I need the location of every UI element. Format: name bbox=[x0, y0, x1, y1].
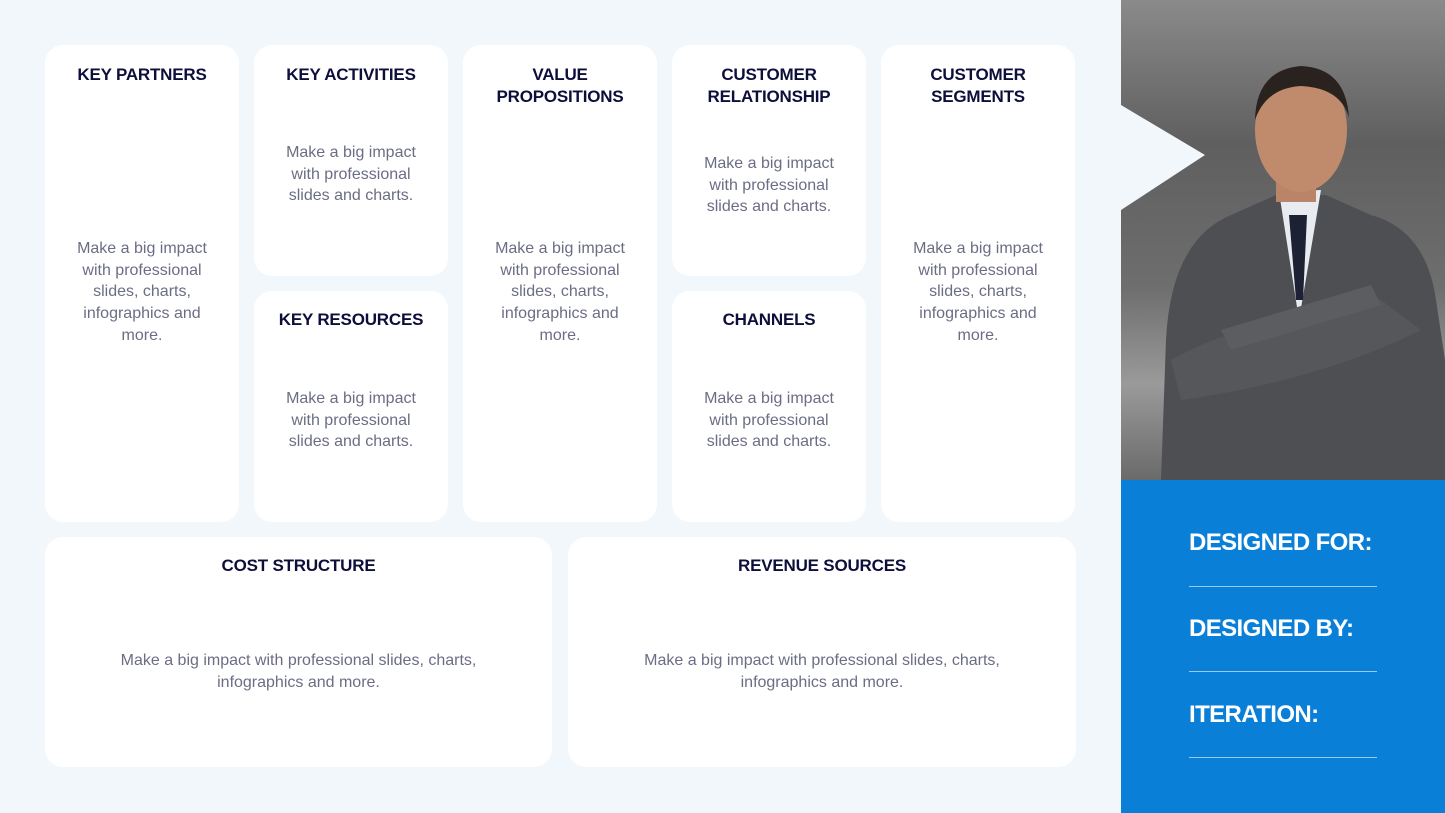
text: value propositions bbox=[495, 240, 625, 344]
text: key partners: Make a big impact bbox=[77, 240, 207, 257]
text: key resources: with professional bbox=[291, 412, 411, 429]
panel: value propositions bbox=[463, 45, 657, 522]
text: customer segments: infographics and bbox=[919, 305, 1037, 322]
text: key activities bbox=[286, 144, 416, 204]
text: value propositions: infographics and bbox=[501, 305, 619, 322]
panel: customer relationship bbox=[672, 45, 866, 276]
heading: value propositions bbox=[496, 65, 624, 106]
text: customer relationship: Make a big impact bbox=[704, 155, 834, 172]
text: revenue sources: infographics and more. bbox=[741, 674, 903, 691]
text: customer relationship bbox=[704, 155, 834, 215]
label: designed for: DESIGNED FOR: bbox=[1189, 529, 1372, 556]
text: cost structure bbox=[121, 652, 476, 691]
text: cost structure: infographics and more. bbox=[217, 674, 380, 691]
panel: key activities bbox=[254, 45, 448, 276]
panel: customer segments bbox=[881, 45, 1075, 522]
text: customer relationship: slides and charts. bbox=[707, 198, 831, 215]
label: iteration: ITERATION: bbox=[1189, 701, 1319, 728]
heading: customer segments bbox=[930, 65, 1026, 106]
text: customer segments: with professional bbox=[918, 262, 1038, 279]
text: value propositions: slides, charts, bbox=[511, 283, 609, 300]
text: key activities: slides and charts. bbox=[289, 187, 413, 204]
heading: cost structure: COST STRUCTURE bbox=[222, 556, 375, 575]
text: revenue sources: Make a big impact with professional slides, charts, bbox=[644, 652, 1000, 669]
text: key partners: more. bbox=[122, 327, 162, 344]
panel: cost structure bbox=[45, 537, 552, 767]
heading: customer segments: SEGMENTS bbox=[931, 87, 1025, 106]
heading: key resources: KEY RESOURCES bbox=[279, 310, 423, 329]
text: customer relationship: with professional bbox=[709, 177, 829, 194]
text: customer segments bbox=[913, 240, 1043, 344]
text: value propositions: with professional bbox=[500, 262, 620, 279]
text: channels: slides and charts. bbox=[707, 433, 831, 450]
heading: value propositions: PROPOSITIONS bbox=[496, 87, 624, 106]
panel: revenue sources bbox=[568, 537, 1076, 767]
panel: design info bbox=[1121, 480, 1445, 813]
text: key activities: with professional bbox=[291, 166, 411, 183]
panel: key partners bbox=[45, 45, 239, 522]
text: key resources: slides and charts. bbox=[289, 433, 413, 450]
text: channels bbox=[704, 390, 834, 450]
text: key partners: with professional bbox=[82, 262, 202, 279]
text: key partners: infographics and bbox=[83, 305, 201, 322]
text: channels: Make a big impact bbox=[704, 390, 834, 407]
heading: key activities: KEY ACTIVITIES bbox=[286, 65, 416, 84]
photo: businessman bbox=[1121, 0, 1445, 480]
text: cost structure: Make a big impact with professional slides, charts, bbox=[121, 652, 476, 669]
text: value propositions: Make a big impact bbox=[495, 240, 625, 257]
text: revenue sources bbox=[644, 652, 1000, 691]
panel: channels bbox=[672, 291, 866, 522]
text: key activities: Make a big impact bbox=[286, 144, 416, 161]
text: key resources: Make a big impact bbox=[286, 390, 416, 407]
heading: key partners: KEY PARTNERS bbox=[77, 65, 207, 84]
heading: value propositions: VALUE bbox=[532, 65, 588, 84]
text: customer segments: more. bbox=[958, 327, 998, 344]
text: key partners bbox=[77, 240, 207, 344]
heading: customer relationship bbox=[708, 65, 830, 106]
heading: customer segments: CUSTOMER bbox=[930, 65, 1026, 84]
text: customer segments: Make a big impact bbox=[913, 240, 1043, 257]
text: key resources bbox=[286, 390, 416, 450]
text: key partners: slides, charts, bbox=[93, 283, 191, 300]
heading: customer relationship: CUSTOMER bbox=[721, 65, 817, 84]
text: value propositions: more. bbox=[540, 327, 580, 344]
label: designed by: DESIGNED BY: bbox=[1189, 615, 1353, 642]
heading: customer relationship: RELATIONSHIP bbox=[708, 87, 830, 106]
heading: channels: CHANNELS bbox=[723, 310, 815, 329]
text: customer segments: slides, charts, bbox=[929, 283, 1027, 300]
heading: revenue sources: REVENUE SOURCES bbox=[738, 556, 906, 575]
panel: key resources bbox=[254, 291, 448, 522]
text: channels: with professional bbox=[709, 412, 829, 429]
